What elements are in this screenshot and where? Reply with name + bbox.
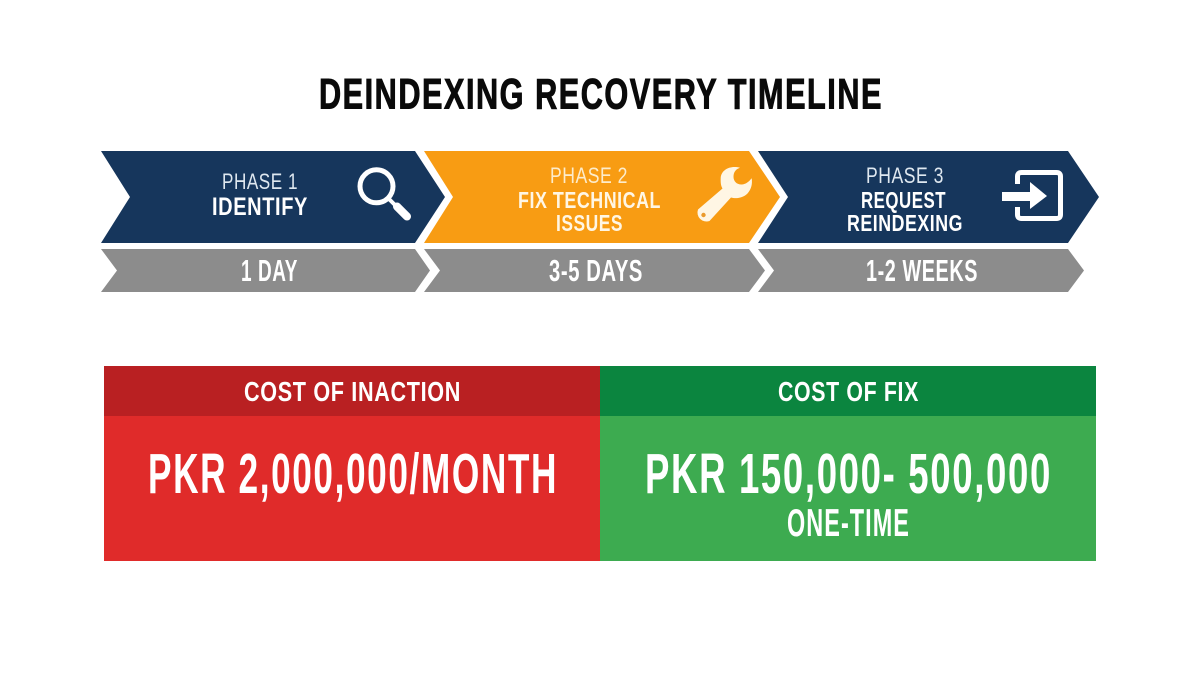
panel: phase 1 [101, 151, 445, 243]
fix body [600, 366, 1096, 561]
phase 2 arrow [424, 151, 780, 243]
phase 3 name line 2: REINDEXING [847, 210, 963, 236]
duration bar: 1-2 weeks [758, 249, 1084, 292]
phase 2 name line 2: ISSUES [556, 210, 623, 236]
phase 2 name line 1: FIX TECHNICAL [518, 187, 661, 213]
fix heading: COST OF FIX [778, 376, 919, 407]
duration bar: 1 day: 1 DAY [241, 253, 298, 288]
phase 2 label: PHASE 2 [550, 163, 628, 188]
phase 3 arrow [758, 151, 1099, 243]
panel: cost of inaction [104, 366, 600, 561]
title: DEINDEXING RECOVERY TIMELINE [319, 70, 883, 118]
icon: magnifying glass [360, 170, 407, 216]
fix header [600, 366, 1096, 416]
icon: wrench [697, 167, 752, 222]
duration bar: 3-5 days: 3-5 DAYS [549, 253, 643, 288]
phase 1 name: IDENTIFY [212, 193, 308, 221]
inaction body [104, 366, 600, 561]
inaction heading: COST OF INACTION [244, 376, 461, 407]
duration bar: 1 day [101, 249, 430, 292]
panel: phase 3 [758, 151, 1099, 243]
inaction header [104, 366, 600, 416]
phase 3 name line 1: REQUEST [861, 187, 946, 213]
phase 1 label: PHASE 1 [222, 169, 298, 194]
duration bar: 3-5 days [424, 249, 765, 292]
panel: cost of fix [600, 366, 1096, 561]
icon: enter arrow into box [1002, 172, 1060, 218]
duration bar: 1-2 weeks: 1-2 WEEKS [866, 253, 978, 288]
panel: phase 2 [424, 151, 780, 243]
phase 1 arrow [101, 151, 445, 243]
inaction amount: PKR 2,000,000/MONTH [148, 442, 558, 506]
fix note: ONE-TIME [787, 502, 910, 545]
phase 3 label: PHASE 3 [866, 163, 944, 188]
